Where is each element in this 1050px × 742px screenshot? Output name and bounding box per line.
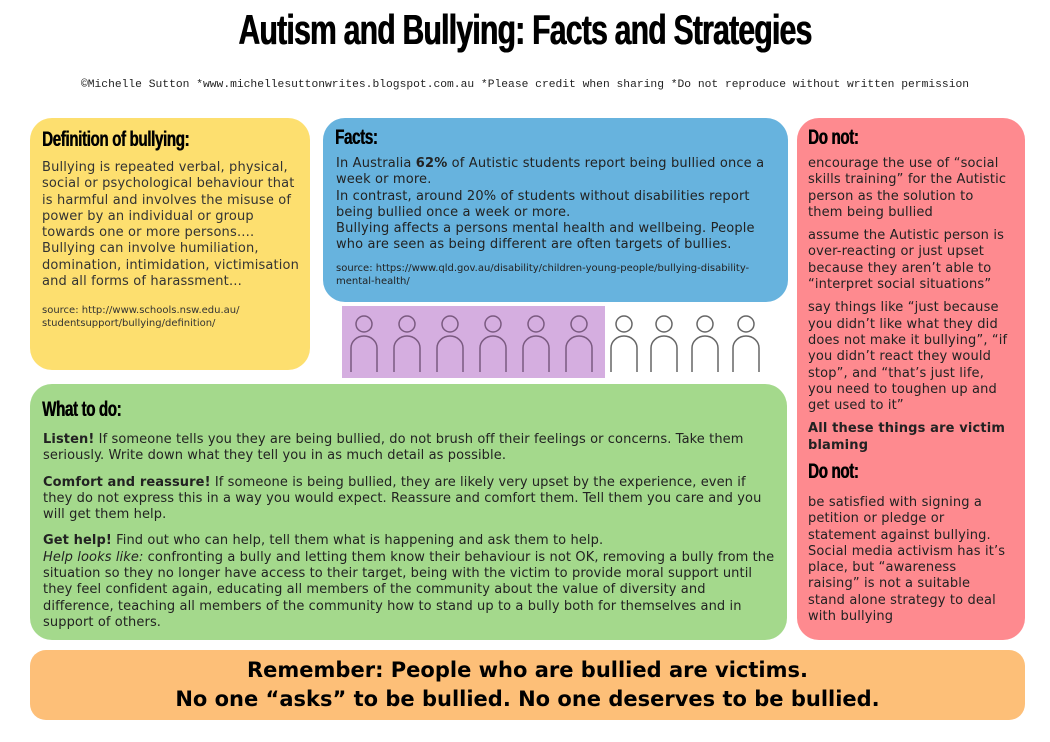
- text: do not list: assume the Autistic person is over-reacting or just upset because they aren’t able to “interpret social situations”: [808, 228, 1004, 292]
- panel: facts: [323, 118, 788, 302]
- text: what to do: Listen! If someone tells you they are being bullied, do not brush off their feelings or concerns. Take them seriously. Write down what they tell you in as much detail as possible.: [43, 432, 744, 463]
- text: do not list: All these things are victim blaming: [808, 421, 1005, 453]
- heading: do not 2: Do not:: [808, 460, 858, 483]
- text: facts: source: https://www.qld.gov.au/disability/children-young-people/bullying-disability-mental-health/: [336, 263, 749, 287]
- title: Autism and Bullying: Facts and Strategies: [238, 6, 812, 53]
- text: do not 2: be satisfied with signing a petition or pledge or statement against bullying. Social media activism has it’s place, but “awareness raising” is not a suitable stand alone strategy to deal with bullying: [808, 495, 1005, 624]
- text: facts: In Australia 62% of Autistic students report being bullied once a week or more.: [336, 156, 764, 187]
- banner: remember: No one “asks” to be bullied. No one deserves to be bullied.: [175, 687, 880, 711]
- text: what to do: Comfort and reassure! If someone is being bullied, they are likely very upset by the experience, even if they do not express this in a way you would expect. Reassure and comfort them. Tell them you care and you will get them help.: [43, 475, 761, 522]
- chart: people pictogram: [342, 306, 760, 378]
- heading: do not 1: Do not:: [808, 126, 858, 149]
- highlight: 62%: [342, 306, 605, 378]
- text: what to do: Get help! Find out who can help, tell them what is happening and ask them to help.: [43, 533, 603, 548]
- text: definition: source: http://www.schools.nsw.edu.au/ studentsupport/bullying/definition/: [42, 305, 239, 329]
- text: facts: Bullying affects a persons mental health and wellbeing. People who are seen as being different are often targets of bullies.: [336, 221, 755, 252]
- heading: definition: Definition of bullying:: [42, 128, 189, 151]
- text: what to do: Help looks like: confronting a bully and letting them know their behaviour is not OK, removing a bully from the situation so they no longer have access to their target, being with the victim to provide moral support until they feel confident again, educating all members of the community about the value of diversity and difference, teaching all members of the community how to stand up to a bully both for themselves and in support of others.: [43, 550, 774, 630]
- text: facts: [336, 156, 764, 287]
- credit line: ©Michelle Sutton *www.michellesuttonwrites.blogspot.com.au *Please credit when sharing *Do not reproduce without written permission: [81, 79, 969, 91]
- heading: facts: Facts:: [335, 126, 377, 149]
- text: facts: In contrast, around 20% of students without disabilities report being bullied once a week or more.: [336, 189, 750, 220]
- text: do not list: say things like “just because you didn’t like what they did does not make it bullying”, “if you didn’t react they would stop”, and “that’s just life, you need to toughen up and get used to it”: [808, 300, 1007, 413]
- banner: remember: [30, 650, 1025, 720]
- panel: what to do: [30, 384, 787, 640]
- text: what to do: [43, 432, 774, 630]
- text: definition: Bullying is repeated verbal, physical, social or psychological behaviour that is harmful and involves the misuse of power by an individual or group towards one or more persons…. Bullying can involve humiliation, domination, intimidation, victimisation and all forms of harassment…: [42, 160, 299, 289]
- text: do not list: encourage the use of “social skills training” for the Autistic person as the solution to them being bullied: [808, 156, 1006, 220]
- panel: definition: [30, 118, 310, 370]
- text: do not list: [808, 156, 1008, 453]
- heading: what to do: What to do:: [42, 398, 121, 421]
- panel: do not: [797, 118, 1025, 640]
- banner: remember: Remember: People who are bullied are victims.: [247, 658, 808, 682]
